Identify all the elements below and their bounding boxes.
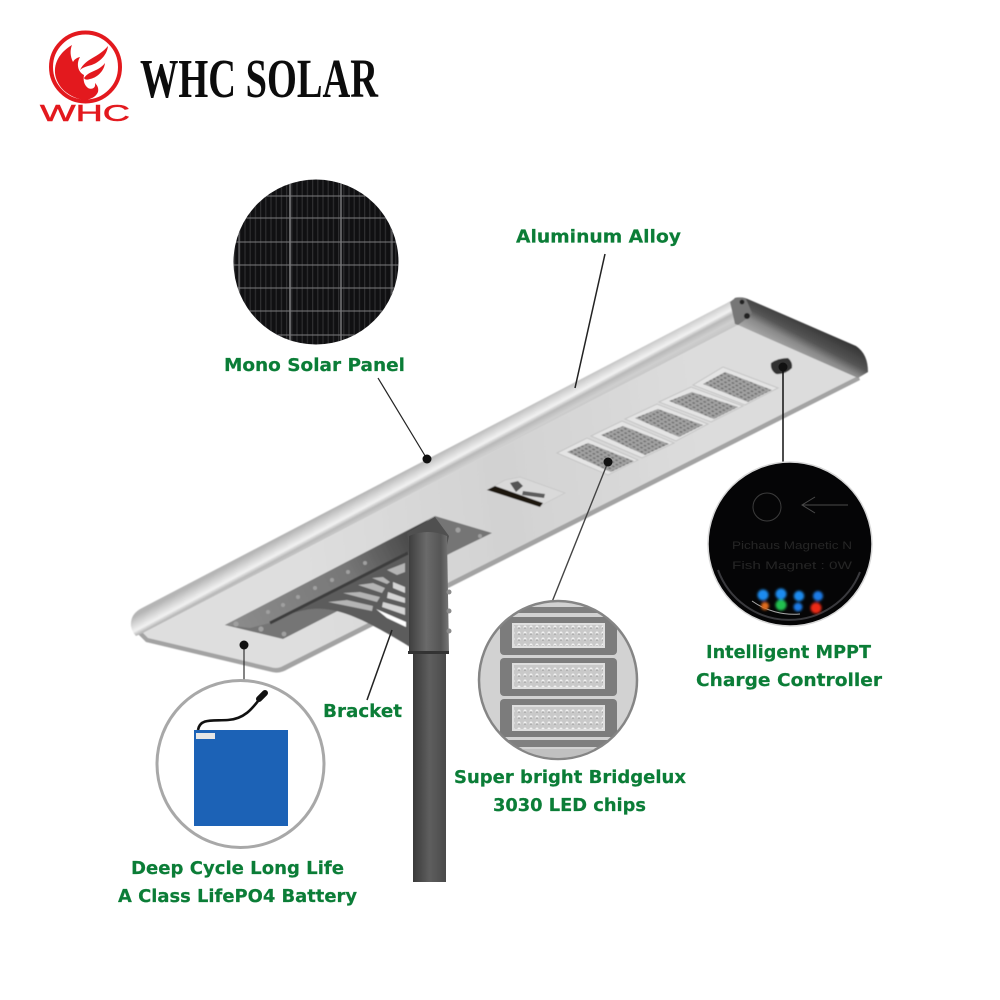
label: controller <box>696 642 882 691</box>
leader: bracket <box>367 630 392 700</box>
leader: mono solar panel <box>378 378 432 464</box>
bottom lip <box>136 372 860 673</box>
LED module 5 <box>693 367 778 405</box>
label: controller: Intelligent MPPT <box>706 642 872 663</box>
battery circle <box>157 680 324 848</box>
aluminum rail <box>131 301 738 636</box>
LED module 2 <box>591 421 674 458</box>
infographic <box>40 30 882 906</box>
indicator lights <box>758 588 823 614</box>
LED row 3 <box>500 699 617 737</box>
end cap <box>730 298 752 325</box>
embossed text <box>732 540 853 572</box>
label: aluminum alloy: Aluminum Alloy <box>516 226 681 248</box>
logo lettering: WHC <box>40 100 130 126</box>
battery cable <box>198 696 262 730</box>
LED module 4 <box>659 387 743 422</box>
bracket back wall <box>225 520 428 628</box>
brand name: WHC SOLAR <box>140 48 379 109</box>
underside panel <box>143 325 858 668</box>
controller sensor <box>771 358 792 374</box>
LED row 2 <box>500 658 617 696</box>
leader: aluminum alloy <box>575 254 605 388</box>
logo: WHC flame emblem <box>40 32 130 126</box>
LED row 1 <box>500 617 617 655</box>
leader: battery <box>240 640 248 681</box>
sticker <box>487 477 565 507</box>
bracket mesh <box>270 552 410 647</box>
embossed text: Pichaus Magnetic N <box>732 540 852 552</box>
controller circle <box>708 462 872 626</box>
LED closeup circle <box>479 601 640 759</box>
pole upper sleeve <box>407 517 452 654</box>
label: battery: Deep Cycle Long Life <box>131 858 344 879</box>
street light pole lower <box>413 650 446 882</box>
plate bolts <box>233 518 482 636</box>
label: battery <box>118 858 357 907</box>
LED module 3 <box>625 404 708 441</box>
label: mono solar panel: Mono Solar Panel <box>224 355 405 376</box>
label: battery: A Class LifePO4 Battery <box>118 886 357 907</box>
arrow <box>802 497 848 513</box>
label: LED chips: 3030 LED chips <box>493 795 646 816</box>
label: LED chips: Super bright Bridgelux <box>454 767 686 788</box>
label: controller: Charge Controller <box>696 670 882 691</box>
leader: controller <box>778 362 788 464</box>
embossed text: Fish Magnet : 0W <box>732 560 853 572</box>
solar street light head <box>131 297 868 673</box>
label: bracket: Bracket <box>323 701 402 722</box>
solar panel circle <box>230 178 400 350</box>
dark end face <box>731 297 868 378</box>
battery label <box>196 733 215 739</box>
LED modules <box>557 367 778 475</box>
battery pack <box>194 730 288 826</box>
leader: LED chips <box>552 458 612 602</box>
mounting plate <box>225 516 492 639</box>
charge icon <box>753 493 781 521</box>
LED module 1 <box>557 438 638 475</box>
label: LED chips <box>454 767 686 816</box>
